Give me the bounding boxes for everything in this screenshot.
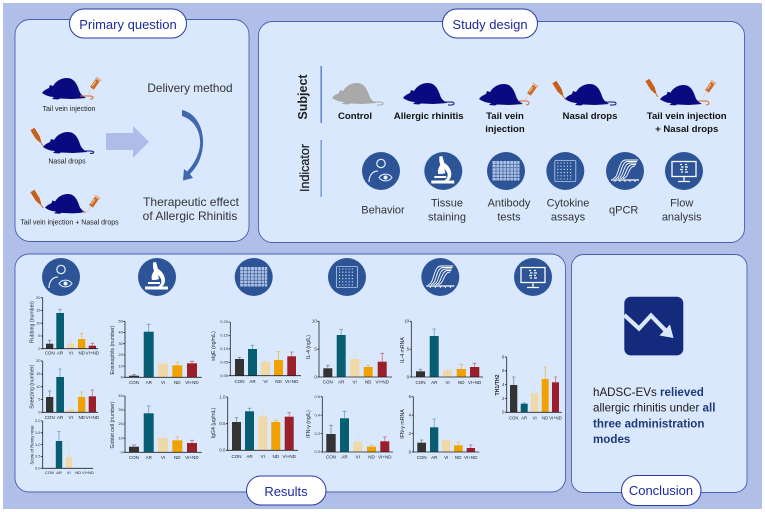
chart: IgG4: ND <box>273 454 280 459</box>
chart: IL-4 protein <box>306 319 392 385</box>
chart: eosinophils: 0 <box>121 374 124 380</box>
icon: flow analysis <box>514 258 552 296</box>
text: conclusion statement: allergic rhinitis under <box>593 402 703 415</box>
icon: mouse with tail vein injection <box>42 77 102 100</box>
chart: goblet cell: VI <box>161 455 165 460</box>
label: antibody tests: Antibody <box>488 198 530 210</box>
chart: sneezing: 20 <box>36 358 41 363</box>
chart: eosinophils: 10 <box>118 363 124 368</box>
divider: subject <box>320 66 322 123</box>
chart: TH1/TH2: TH1/TH2 <box>495 374 501 396</box>
text: conclusion statement: three administration <box>593 418 704 430</box>
chart: IgG4: AR <box>246 454 253 459</box>
chart: TH1/TH2: VI <box>533 416 537 420</box>
chart: sneezing <box>30 358 100 420</box>
chart: IL-4 mRNA: IL-4 mRNA <box>400 337 406 363</box>
heading: conclusion <box>622 476 701 506</box>
chart: sIgE: VI+ND <box>285 379 299 384</box>
chart: TH1/TH2: CON <box>509 416 518 420</box>
icon: antibody tests <box>235 258 273 296</box>
label: behavior: Behavior <box>361 204 405 216</box>
chart: sIgE: 0.10 <box>220 346 229 351</box>
heading: results <box>246 476 326 505</box>
chart: IFN-gamma mRNA: CON <box>417 455 427 460</box>
panel: primary question <box>15 9 249 242</box>
icon: behavior <box>362 152 400 190</box>
chart: sneezing: VI <box>69 415 73 420</box>
chart: goblet cell: 10 <box>118 435 124 440</box>
panel: conclusion <box>572 254 747 506</box>
chart: TH1/TH2: VI+ND <box>549 416 562 420</box>
chart: IFN-gamma protein: CON <box>326 455 336 460</box>
chart: runny nose score: Score of Runny nose <box>30 425 34 465</box>
chart: rubbing: 0 <box>38 346 41 351</box>
heading: conclusion: Conclusion <box>629 483 693 498</box>
chart: sIgE: 0.00 <box>220 373 229 378</box>
chart: IL-4 mRNA <box>400 319 483 385</box>
chart: runny nose score: 1.0 <box>35 442 41 447</box>
chart: goblet cell: CON <box>129 455 139 460</box>
chart: rubbing: VI+ND <box>86 350 100 356</box>
chart: runny nose score: AR <box>56 470 62 475</box>
heading: study design: Study design <box>452 17 528 32</box>
chart: rubbing: CON <box>45 350 55 356</box>
chart: IFN-gamma protein: AR <box>341 455 348 460</box>
heading: study design <box>442 9 538 38</box>
icon: declining trend <box>624 297 683 355</box>
chart: runny nose score: CON <box>45 470 54 475</box>
label: combined route: Tail vein injection <box>647 111 727 122</box>
chart: IFN-gamma mRNA: 6 <box>409 394 412 399</box>
chart: IFN-gamma mRNA: 4 <box>409 412 412 418</box>
icon: mouse with both routes <box>30 190 101 214</box>
chart: rubbing <box>30 295 100 356</box>
chart: IL-4 protein: ND <box>365 380 372 385</box>
chart: goblet cell: ND <box>174 455 181 460</box>
chart: IFN-gamma protein <box>306 394 393 460</box>
arrow: curved <box>182 110 203 180</box>
chart: IFN-gamma mRNA: ND <box>455 455 462 460</box>
chart: IL-4 mRNA: 5 <box>407 347 410 352</box>
chart: IFN-gamma protein: 0.2 <box>315 431 321 436</box>
chart: TH1/TH2: 4 <box>502 382 505 387</box>
text: therapeutic effect: of Allergic Rhinitis <box>143 209 237 223</box>
icon: control mouse <box>332 83 383 105</box>
chart: IgG4 <box>211 394 298 459</box>
text: conclusion statement: modes <box>593 433 630 446</box>
chart: IFN-gamma mRNA: VI+ND <box>464 455 478 460</box>
chart: runny nose score: 2.0 <box>35 418 41 423</box>
chart: IL-4 protein: IL-4 (ng/L) <box>306 335 312 359</box>
label: flow analysis: analysis <box>662 212 702 224</box>
chart: IL-4 protein: 5 <box>314 347 317 352</box>
label: tail vein injection: Tail vein injection <box>43 106 96 113</box>
icon: mouse with nasal drops <box>30 128 94 154</box>
heading: results: Results <box>264 484 308 499</box>
divider: indicator <box>320 140 322 197</box>
icon: allergic rhinitis mouse <box>403 83 454 105</box>
icon: behavior <box>42 258 80 296</box>
label: flow analysis: Flow <box>670 198 693 210</box>
chart: sIgE: ND <box>275 379 282 384</box>
chart: runny nose score: 0.5 <box>35 454 41 459</box>
label: cytokine assays: assays <box>551 212 586 224</box>
chart: IFN-gamma mRNA: 0 <box>409 449 412 454</box>
chart: sneezing: AR <box>57 415 64 420</box>
chart: IFN-gamma mRNA: AR <box>431 455 438 460</box>
icon: antibody tests <box>487 152 525 190</box>
heading: subject: Subject <box>296 74 310 120</box>
chart: goblet cell: 30 <box>118 407 124 412</box>
icon: tissue staining <box>138 258 176 296</box>
chart: IFN-gamma protein: 0.4 <box>315 412 321 417</box>
icon: cytokine assays <box>328 258 366 296</box>
arrow: right <box>106 126 149 158</box>
chart: runny nose score: ND <box>75 470 81 475</box>
chart: rubbing: 5 <box>38 333 41 338</box>
label: control: Control <box>338 111 372 122</box>
chart: runny nose score <box>30 418 94 475</box>
text: therapeutic effect: Therapeutic effect <box>143 195 239 209</box>
chart: runny nose score: VI+ND <box>82 470 94 475</box>
icon: tissue staining <box>424 152 462 190</box>
chart: IL-4 protein: CON <box>323 380 333 385</box>
chart: IL-4 protein: VI <box>352 380 357 385</box>
chart: eosinophils: 30 <box>118 341 124 346</box>
chart: runny nose score: 1.5 <box>35 430 41 435</box>
chart: goblet cell <box>110 393 202 460</box>
chart: IL-4 protein: 0 <box>314 374 317 379</box>
label: nasal drops: Nasal drops <box>563 111 617 122</box>
chart: sIgE: CON <box>234 379 244 384</box>
chart: sIgE: sIgE (ng/mL) <box>211 331 217 361</box>
label: tail vein injection: injection <box>485 124 525 135</box>
chart: IgG4: 1.0 <box>219 394 226 399</box>
label: antibody tests: tests <box>497 212 521 224</box>
chart: runny nose score: VI <box>67 470 71 475</box>
chart: IL-4 mRNA: VI <box>445 380 450 385</box>
chart: sIgE <box>211 319 301 384</box>
chart: IFN-gamma protein: ND <box>368 455 375 460</box>
chart: TH1/TH2 <box>495 354 562 420</box>
chart: sneezing: 5 <box>38 397 41 402</box>
chart: goblet cell: 20 <box>118 421 124 426</box>
label: combined route: + Nasal drops <box>655 124 718 135</box>
icon: nasal drops mouse <box>552 81 616 106</box>
chart: IFN-gamma protein: 0.6 <box>315 394 321 399</box>
heading: primary question <box>70 9 186 38</box>
chart: eosinophils: ND <box>174 380 181 385</box>
label: qPCR: qPCR <box>609 204 638 216</box>
panel: study design <box>258 9 744 242</box>
label: allergic rhinitis: Allergic rhinitis <box>394 111 464 122</box>
chart: sneezing: CON <box>45 415 55 420</box>
chart: IgG4: 0.5 <box>219 421 226 426</box>
chart: TH1/TH2: 2 <box>502 396 505 401</box>
label: tissue staining: Tissue <box>431 198 463 210</box>
chart: IFN-gamma mRNA: VI <box>444 455 448 460</box>
chart: sIgE: 0.15 <box>220 333 229 338</box>
chart: eosinophils: Eosinophils (number) <box>110 325 116 375</box>
chart: eosinophils: VI+ND <box>185 380 199 385</box>
chart: IgG4: CON <box>232 454 242 459</box>
chart: sIgE: 0.05 <box>220 360 229 364</box>
chart: IFN-gamma protein: IFN-γ (ng/L) <box>306 410 312 438</box>
chart: goblet cell: AR <box>146 455 153 460</box>
chart: IFN-gamma mRNA <box>400 394 479 460</box>
chart: rubbing: ND <box>78 350 86 356</box>
icon: qPCR <box>421 258 459 296</box>
chart: IgG4: VI <box>261 454 265 459</box>
chart: goblet cell: 40 <box>118 393 124 398</box>
icon: combined route mouse <box>645 79 717 105</box>
chart: IFN-gamma mRNA: IFN-γ mRNA <box>400 409 406 439</box>
chart: eosinophils <box>110 318 202 385</box>
chart: rubbing: 10 <box>36 320 41 325</box>
label: both routes: Tail vein injection + Nasal drops <box>20 220 119 226</box>
chart: sIgE: AR <box>249 379 256 384</box>
chart: sneezing: 10 <box>36 384 41 389</box>
text: delivery method: Delivery method <box>147 81 233 95</box>
label: nasal drops: Nasal drops <box>48 158 86 166</box>
icon: qPCR <box>606 152 644 190</box>
chart: goblet cell: 0 <box>121 450 124 454</box>
chart: TH1/TH2: AR <box>521 416 527 420</box>
chart: TH1/TH2: 0 <box>502 410 505 415</box>
chart: sneezing: 15 <box>36 371 41 376</box>
heading: primary question: Primary question <box>79 17 177 32</box>
text: conclusion statement: all <box>703 402 715 415</box>
chart: IFN-gamma protein: VI <box>356 455 360 460</box>
chart: sIgE: VI <box>263 379 268 384</box>
panel: results <box>15 254 566 505</box>
chart: IFN-gamma protein: VI+ND <box>378 455 392 460</box>
chart: eosinophils: 40 <box>118 330 124 335</box>
chart: eosinophils: CON <box>129 380 139 385</box>
chart: sneezing: VI+ND <box>86 415 100 420</box>
label: tail vein injection: Tail vein <box>486 111 524 122</box>
chart: goblet cell: VI+ND <box>185 455 199 460</box>
chart: sIgE: 0.20 <box>220 319 229 324</box>
chart: TH1/TH2: 8 <box>502 354 505 359</box>
chart: IL-4 mRNA: VI+ND <box>468 380 482 385</box>
chart: IL-4 mRNA: AR <box>431 380 438 385</box>
chart: eosinophils: 20 <box>118 352 124 357</box>
chart: sneezing: Sneezing (number) <box>30 364 36 409</box>
chart: IgG4: VI+ND <box>283 454 297 459</box>
chart: IL-4 mRNA: 0 <box>407 374 410 379</box>
chart: IL-4 protein: AR <box>338 380 345 385</box>
chart: TH1/TH2: ND <box>542 416 548 420</box>
chart: IgG4: 0.0 <box>219 448 226 453</box>
chart: IL-4 protein: VI+ND <box>376 380 390 385</box>
chart: rubbing: 15 <box>36 308 41 313</box>
chart: IL-4 mRNA: ND <box>458 380 465 385</box>
chart: sneezing: ND <box>78 415 86 420</box>
chart: eosinophils: VI <box>161 380 165 385</box>
chart: eosinophils: 50 <box>118 318 124 324</box>
heading: indicator: Indicator <box>298 144 312 192</box>
chart: TH1/TH2: 6 <box>502 368 505 373</box>
chart: rubbing: AR <box>57 350 64 356</box>
chart: goblet cell: Goblet cell (number) <box>110 401 116 448</box>
label: tissue staining: staining <box>428 212 466 224</box>
chart: rubbing: Rubbing (number) <box>30 301 36 343</box>
chart: IFN-gamma protein: 0.0 <box>315 449 321 454</box>
label: cytokine assays: Cytokine <box>547 198 589 210</box>
chart: sneezing: 0 <box>38 410 41 414</box>
chart: IgG4: IgG4 (μg/mL) <box>211 407 217 438</box>
chart: IL-4 mRNA: CON <box>416 380 426 385</box>
chart: eosinophils: AR <box>146 380 153 385</box>
chart: rubbing: 20 <box>36 295 41 300</box>
chart: IFN-gamma mRNA: 2 <box>409 431 412 436</box>
icon: tail vein mouse <box>479 83 539 106</box>
chart: IL-4 mRNA: 10 <box>404 319 410 324</box>
chart: IL-4 protein: 10 <box>312 319 317 324</box>
chart: rubbing: VI <box>69 350 73 356</box>
text: conclusion statement: hADSC-EVs relieved <box>593 386 704 399</box>
chart: runny nose score: 0.0 <box>35 466 41 470</box>
icon: cytokine assays <box>546 152 584 190</box>
icon: flow analysis <box>665 152 703 190</box>
